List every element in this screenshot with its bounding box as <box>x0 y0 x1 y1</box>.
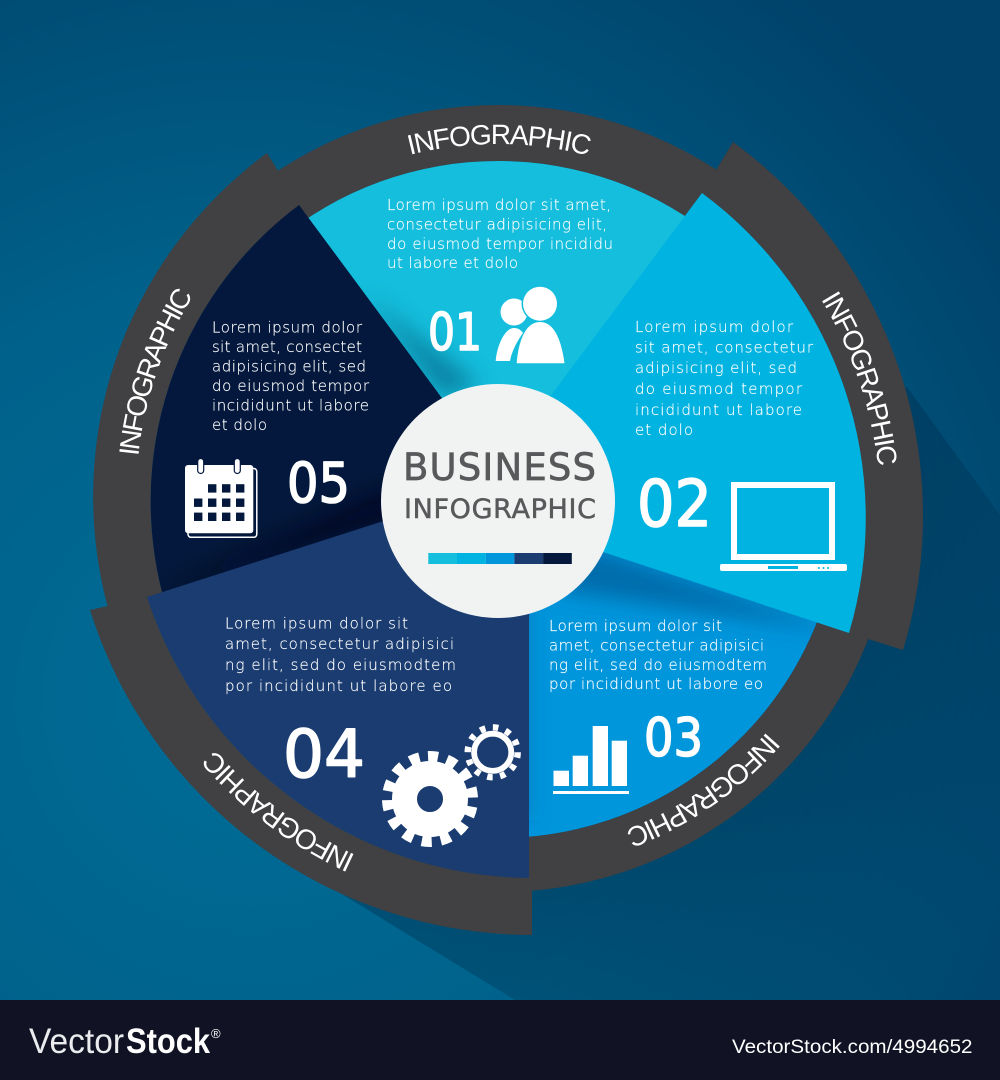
ring 02: INFOGRAPHIC <box>822 291 896 465</box>
wedge 03 <box>440 408 841 838</box>
text block 03: por incididunt ut labore eo <box>549 675 763 693</box>
icon: calendar <box>185 458 257 537</box>
text block 02: adipisicing elit, sed <box>635 359 797 377</box>
text block 04: ng elit, sed do eiusmodtem <box>225 656 456 674</box>
number 03: 03 <box>644 708 703 769</box>
ring 04: INFOGRAPHIC <box>204 753 354 872</box>
text block 05: sit amet, consectet <box>212 338 362 356</box>
ring 03 <box>434 403 868 891</box>
footer logo: Stock <box>126 1022 210 1061</box>
text block 02: et dolo <box>635 421 693 439</box>
text block 04: por incididunt ut labore eo <box>225 677 452 695</box>
number 04: 04 <box>283 716 365 793</box>
text block 03: Lorem ipsum dolor sit <box>549 617 722 635</box>
wedge 01 shadow <box>374 302 481 398</box>
footer logo: Vector <box>29 1022 124 1061</box>
icon: gears <box>386 727 518 843</box>
text block 04: amet, consectetur adipisici <box>225 635 454 653</box>
text block 01: Lorem ipsum dolor sit amet, <box>387 196 611 214</box>
centre circle <box>381 384 615 618</box>
text block 01 <box>387 196 613 272</box>
text block 03: ng elit, sed do eiusmodtem <box>549 656 767 674</box>
text block 02: incididunt ut labore <box>635 401 802 419</box>
footer logo: ® <box>211 1026 221 1041</box>
text block 05 <box>212 319 370 434</box>
text block 05: et dolo <box>212 416 267 434</box>
ring 05 <box>93 153 278 614</box>
heading: business: BUSINESS <box>403 446 596 489</box>
text block 03: amet, consectetur adipisici <box>549 637 764 655</box>
segment 03 <box>434 403 868 891</box>
segment 04 <box>90 521 532 935</box>
ring 01: INFOGRAPHIC <box>408 124 591 154</box>
ring 03: INFOGRAPHIC <box>628 734 780 846</box>
text block 01: ut labore et dolo <box>387 254 518 272</box>
icon: people <box>496 285 564 363</box>
ring 04 <box>90 606 532 935</box>
text block 05: Lorem ipsum dolor <box>212 319 363 337</box>
footer logo <box>29 1022 221 1061</box>
long shadow behind the wheel <box>340 387 1000 1000</box>
icon: bar chart <box>553 726 629 794</box>
text block 01: do eiusmod tempor incididu <box>387 235 613 253</box>
ring 05: INFOGRAPHIC <box>119 288 190 454</box>
wedge 01 <box>276 161 720 506</box>
text block 01: consectetur adipisicing elit, <box>387 216 607 234</box>
heading: infographic: INFOGRAPHIC <box>404 494 596 525</box>
footer band <box>0 1000 1000 1080</box>
text block 02: do eiusmod tempor <box>635 380 803 398</box>
number 01: 01 <box>428 303 482 363</box>
text block 05: adipisicing elit, sed <box>212 358 366 376</box>
number 05: 05 <box>287 451 350 515</box>
segment 05 <box>93 153 442 614</box>
wedge 05 <box>151 205 470 610</box>
text block 02: Lorem ipsum dolor <box>635 318 794 336</box>
text block 02 <box>635 318 814 439</box>
wedge 04 <box>147 490 529 878</box>
text block 02: sit amet, consectetur <box>635 339 814 357</box>
number 02: 02 <box>637 468 712 542</box>
ring 01 <box>268 105 736 232</box>
segment 02 <box>550 142 923 650</box>
footer url: VectorStock.com/4994652 <box>732 1037 972 1058</box>
wedge 02 <box>473 193 866 633</box>
text block 05: do eiusmod tempor <box>212 377 370 395</box>
text block 04: Lorem ipsum dolor sit <box>225 615 408 633</box>
ring 02 <box>716 142 923 650</box>
text block 04 <box>225 615 456 695</box>
segment 01 <box>268 105 736 398</box>
wedge 05 shadow <box>196 483 382 580</box>
colour bar <box>428 553 572 564</box>
text block 05: incididunt ut labore <box>212 397 369 415</box>
icon: laptop <box>720 485 847 571</box>
wedge 03 shadows <box>520 540 849 820</box>
text block 03 <box>549 617 767 693</box>
